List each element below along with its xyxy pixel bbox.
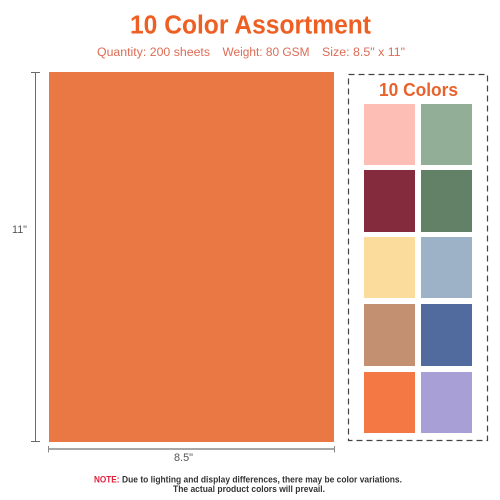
note [94,474,402,495]
orange paper sheet [49,72,334,442]
swatch: pale yellow [364,237,415,298]
panel: color swatches [348,74,488,440]
swatch: dusty blue [421,237,472,298]
specifications line: Weight: 80 GSM [222,47,310,59]
swatch: denim blue [421,304,472,366]
dashed panel border [348,74,488,440]
specifications line: Quantity: 200 sheets [97,47,210,59]
swatch: orange [364,372,415,433]
height label: 11" [12,224,27,236]
swatch: burgundy [364,170,415,232]
height dimension line [31,72,40,442]
swatch: sage green [421,104,472,165]
note first line: Due to lighting and display differences, there may be color variations. [122,474,402,486]
swatch: pink [364,104,415,165]
specifications line [97,47,405,59]
swatch: lavender [421,372,472,433]
width label: 8.5" [174,452,193,464]
note second line: The actual product colors will prevail. [173,484,325,495]
note label: NOTE: [94,474,120,486]
specifications line: Size: 8.5" x 11" [322,47,405,59]
width dimension line [48,446,334,452]
swatch: forest green [421,170,472,232]
panel heading: 10 Colors [379,80,458,100]
title: 10 Color Assortment [130,12,371,40]
swatch: tan [364,304,415,366]
